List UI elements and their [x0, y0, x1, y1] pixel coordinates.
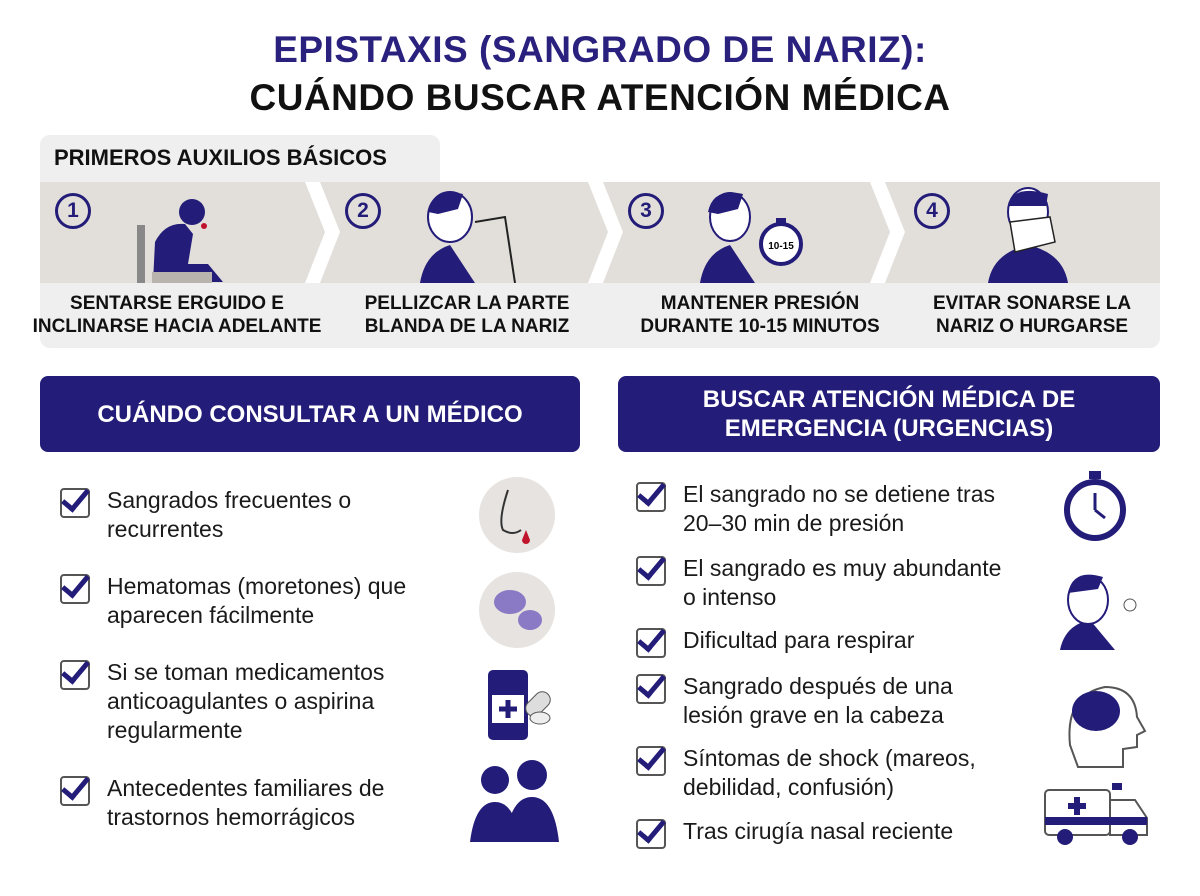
list: consult: Si se toman medicamentos [107, 659, 384, 685]
list: consult: trastornos hemorrágicos [107, 804, 355, 830]
title: EPISTAXIS (SANGRADO DE NARIZ): [273, 29, 927, 70]
header: consult doctor [40, 376, 580, 452]
panel: first aid: 2 [357, 199, 369, 222]
step4 figure [988, 188, 1068, 283]
steps strip [40, 182, 1160, 283]
panel: first aid: NARIZ O HURGARSE [936, 316, 1128, 337]
list: consult: Sangrados frecuentes o [107, 487, 351, 513]
list: consult [60, 487, 406, 830]
step numbers [55, 193, 91, 229]
panel: first aid: MANTENER PRESIÓN [661, 293, 859, 314]
step labels: INCLINARSE HACIA ADELANTE [33, 316, 321, 337]
list: consult: aparecen fácilmente [107, 602, 314, 628]
list: consult: anticoagulantes o aspirina [107, 688, 374, 714]
step labels: SENTARSE ERGUIDO E [70, 293, 284, 314]
list: emergency: o intenso [683, 584, 776, 610]
list: emergency: debilidad, confusión) [683, 774, 894, 800]
list: emergency: 20–30 min de presión [683, 510, 904, 536]
tab heading [40, 135, 440, 185]
list: emergency: Sangrado después de una [683, 673, 953, 699]
header: emergency: BUSCAR ATENCIÓN MÉDICA DE [703, 386, 1075, 413]
panel: first aid: EVITAR SONARSE LA [933, 293, 1131, 314]
step1 figure [137, 199, 223, 283]
header: emergency: EMERGENCIA (URGENCIAS) [725, 415, 1053, 442]
list: consult: recurrentes [107, 516, 223, 542]
list: consult: Hematomas (moretones) que [107, 573, 406, 599]
icons: consult [470, 477, 559, 842]
list: emergency: Tras cirugía nasal reciente [683, 818, 953, 844]
step labels [33, 293, 321, 337]
title [249, 29, 951, 118]
icons: emergency [1044, 471, 1148, 845]
list: emergency: El sangrado no se detiene tras [683, 481, 995, 507]
list: consult: Antecedentes familiares de [107, 775, 384, 801]
tab heading: PRIMEROS AUXILIOS BÁSICOS [54, 145, 387, 170]
panel: first aid: 3 [640, 199, 652, 222]
panel: first aid [33, 135, 1160, 348]
header: consult doctor: CUÁNDO CONSULTAR A UN MÉDICO [97, 400, 523, 428]
list: emergency: lesión grave en la cabeza [683, 702, 944, 728]
list: emergency: Síntomas de shock (mareos, [683, 745, 976, 771]
panel: first aid: PELLIZCAR LA PARTE [365, 293, 569, 314]
step3 figure [700, 192, 801, 283]
step3 figure: 10-15 [768, 241, 794, 252]
step numbers: 1 [67, 199, 79, 222]
step2 figure [420, 192, 515, 283]
list: consult: regularmente [107, 717, 243, 743]
header: emergency [618, 376, 1160, 452]
title: CUÁNDO BUSCAR ATENCIÓN MÉDICA [249, 77, 951, 118]
list: emergency: El sangrado es muy abundante [683, 555, 1001, 581]
list: emergency [636, 481, 1001, 849]
panel: first aid: BLANDA DE LA NARIZ [365, 316, 569, 337]
panel: first aid: DURANTE 10-15 MINUTOS [640, 316, 880, 337]
list: emergency: Dificultad para respirar [683, 627, 914, 653]
panel: first aid: 4 [926, 199, 938, 222]
